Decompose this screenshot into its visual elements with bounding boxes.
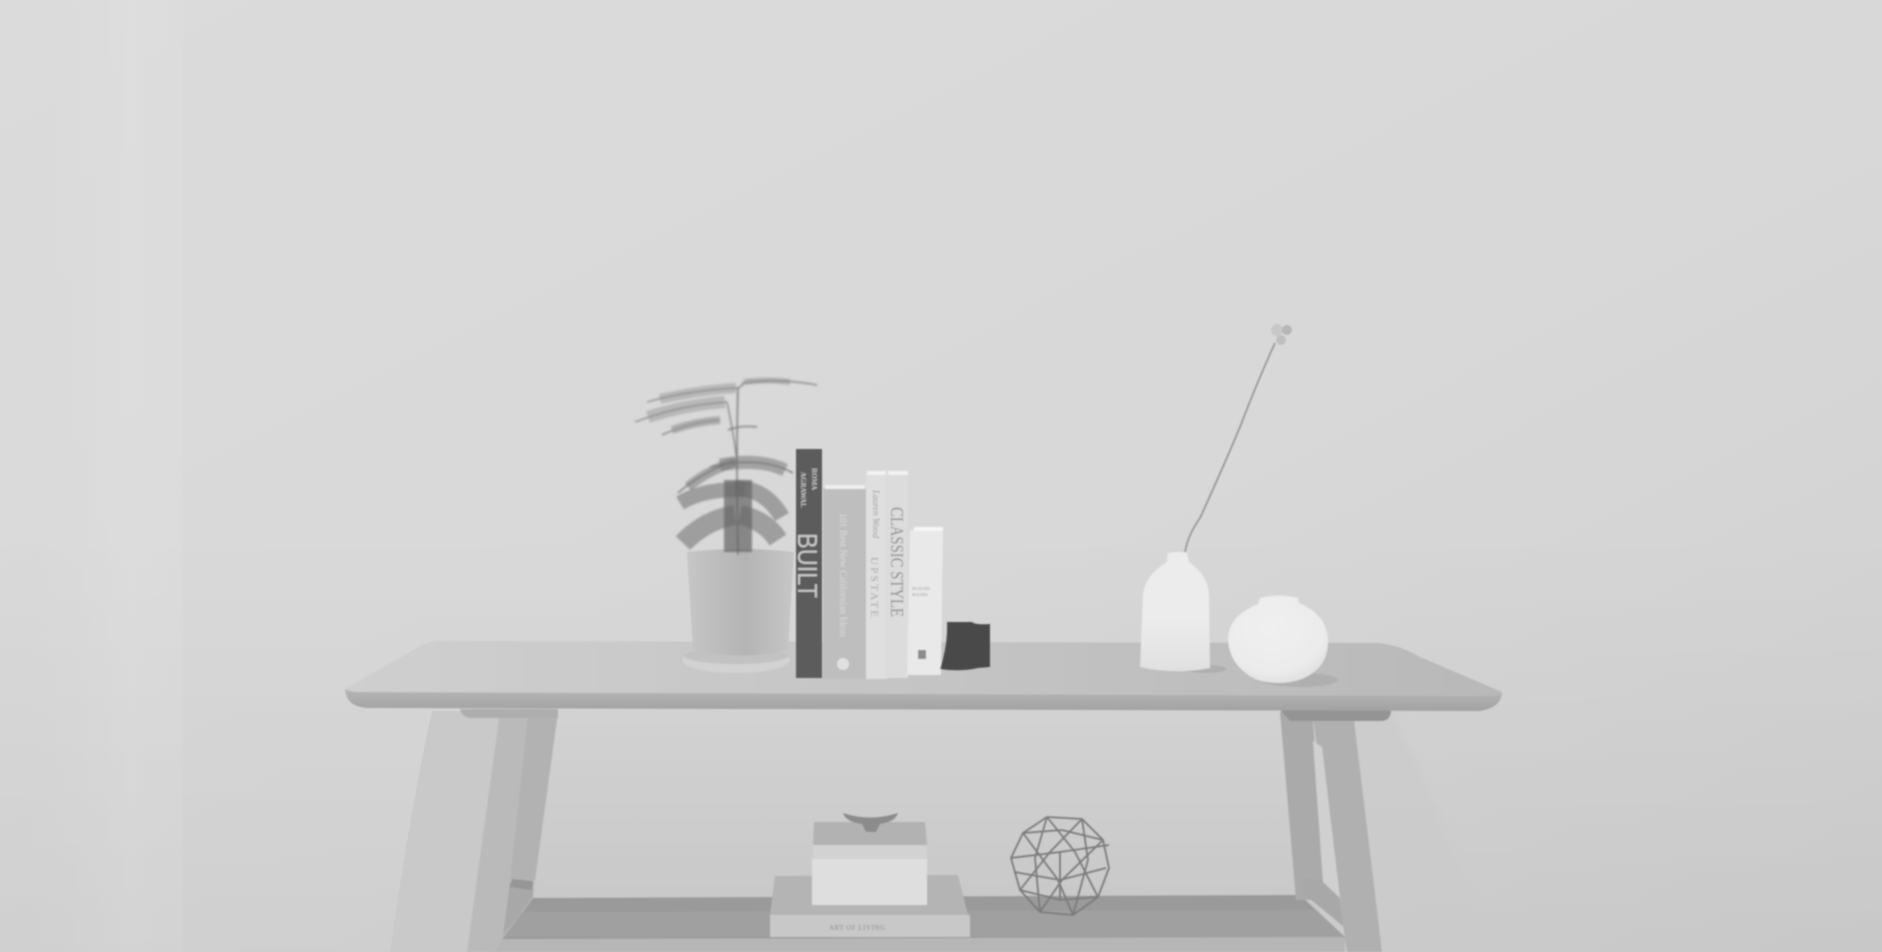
book: Classic Style: CLASSIC STYLE bbox=[887, 507, 907, 617]
saucer bbox=[682, 647, 790, 673]
book: Californian Ideas: 101 Best New Californian Ideas bbox=[837, 513, 849, 637]
stacked book bbox=[770, 875, 970, 937]
wire sphere bbox=[1011, 817, 1109, 915]
dried stem bbox=[1185, 343, 1275, 552]
vase shadows bbox=[1183, 665, 1338, 687]
book: Built: AGRAWAL bbox=[799, 472, 807, 508]
dark candle holder bbox=[940, 622, 990, 670]
bottle vase bbox=[1140, 552, 1210, 671]
book: Californian Ideas bbox=[823, 485, 866, 679]
left table leg bbox=[467, 712, 558, 952]
table apron bbox=[460, 709, 1391, 721]
book: white spine: RICHARD bbox=[912, 586, 930, 591]
stacked book: ART OF LIVING bbox=[829, 924, 886, 932]
lower frond mass bbox=[678, 460, 793, 552]
pot bbox=[687, 549, 794, 656]
book: Upstate bbox=[866, 471, 887, 679]
upper fronds bbox=[635, 380, 817, 435]
book: Classic Style bbox=[885, 471, 908, 678]
book: Built: ROMA bbox=[810, 468, 818, 490]
table front edge bbox=[345, 689, 1502, 711]
fern fronds bbox=[635, 380, 817, 555]
table top surface bbox=[345, 641, 1502, 696]
book: Built: BUILT bbox=[792, 533, 823, 598]
book: white spine bbox=[907, 527, 943, 675]
table bbox=[345, 641, 1502, 952]
potted fern bbox=[635, 380, 817, 673]
round vase bbox=[1228, 596, 1328, 683]
book: Upstate: UPSTATE bbox=[868, 557, 880, 617]
right table leg bbox=[1280, 712, 1382, 952]
vases with dried stem bbox=[1140, 324, 1338, 687]
flower head bbox=[1271, 324, 1292, 345]
marble box bbox=[812, 822, 927, 905]
lower shelf bbox=[495, 895, 1345, 952]
book: Built bbox=[792, 449, 823, 678]
box handle bbox=[843, 813, 898, 832]
book: Upstate: Lauren Wood bbox=[871, 489, 881, 539]
shelf objects bbox=[770, 813, 1109, 937]
book: white spine: ROGERS bbox=[912, 592, 928, 597]
upright books bbox=[792, 449, 990, 679]
